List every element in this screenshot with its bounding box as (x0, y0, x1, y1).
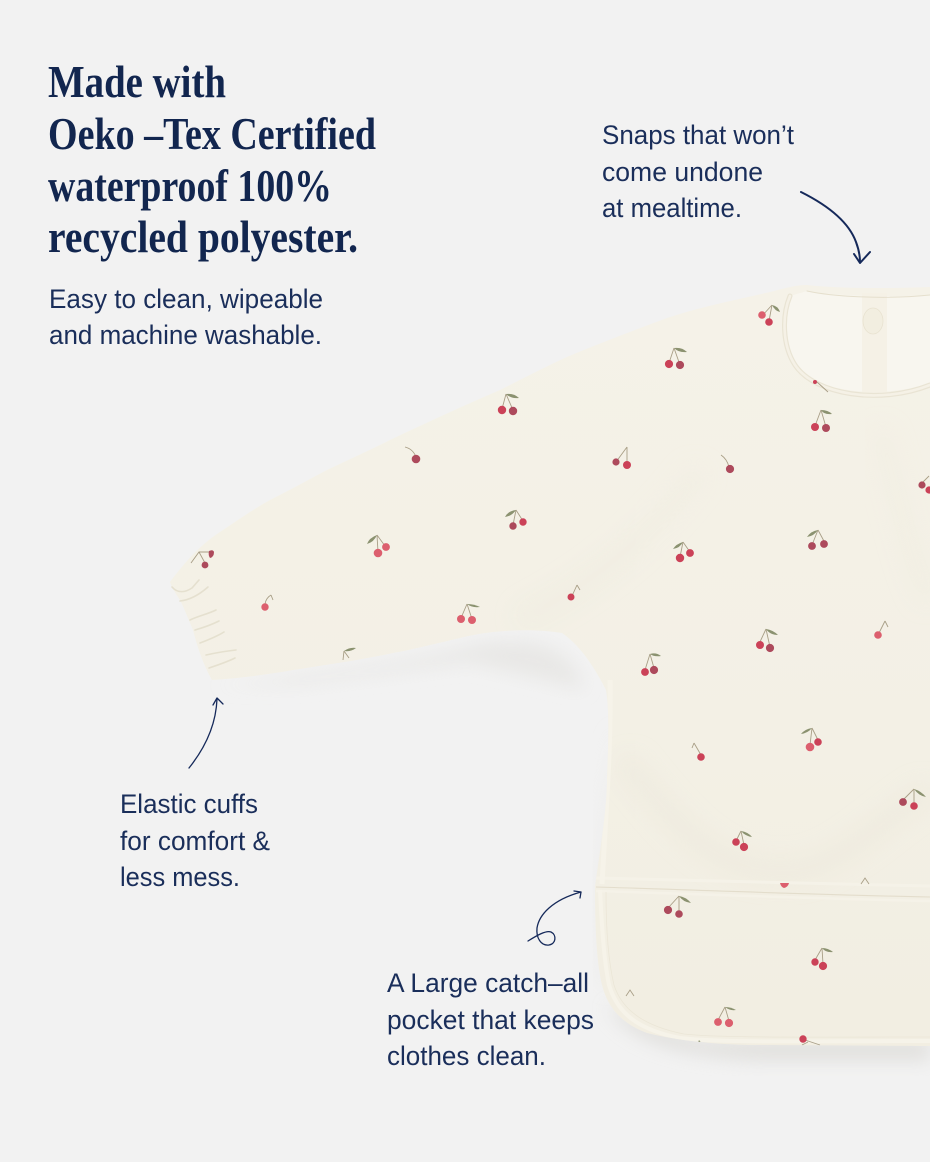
cherry 6 (721, 455, 734, 473)
snap button (863, 308, 883, 334)
heading (48, 56, 376, 262)
fabric folds (520, 430, 930, 871)
subheading text: and machine washable. (49, 320, 322, 350)
bib body (170, 285, 930, 1046)
cherry 33 (813, 380, 828, 392)
callout: pocket: clothes clean. (387, 1041, 546, 1071)
cherry 10 (367, 535, 390, 557)
callout: elastic cuffs: for comfort & (120, 826, 270, 856)
cherry 29 (714, 1007, 736, 1027)
arrow: elastic cuffs (189, 698, 223, 768)
callout: elastic cuffs: less mess. (120, 862, 240, 892)
cherry 16 (568, 585, 580, 600)
cherry 23 (899, 789, 926, 810)
cherry print (191, 305, 930, 1045)
callout: elastic cuffs (120, 789, 270, 892)
callout: snaps: come undone (602, 157, 763, 187)
cherry 8 (918, 476, 930, 494)
cherry 17 (343, 648, 356, 660)
neck opening inner lining (785, 291, 930, 392)
cherry 21 (801, 728, 822, 751)
cherry 14 (261, 595, 273, 611)
callout: snaps: Snaps that won’t (602, 120, 794, 150)
callout: elastic cuffs: Elastic cuffs (120, 789, 258, 819)
heading: recycled polyester. (48, 211, 358, 262)
cherry 3 (498, 394, 519, 415)
cherry 26 (861, 878, 869, 884)
collar binding (785, 291, 930, 395)
subheading text (49, 284, 323, 350)
bib garment (170, 285, 930, 1046)
cherry 18 (641, 653, 661, 676)
shadow under bib (215, 641, 930, 1060)
cherry 12 (807, 530, 828, 550)
callout: pocket: A Large catch–all (387, 968, 589, 998)
cherry 27 (664, 896, 691, 918)
callout: pocket: pocket that keeps (387, 1005, 594, 1035)
cherry 13 (191, 550, 214, 568)
cherry 1 (758, 305, 780, 326)
heading: waterproof 100% (48, 160, 332, 211)
subheading text: Easy to clean, wipeable (49, 284, 323, 314)
cherry 31 (799, 1035, 820, 1045)
pocket seam and bindings (596, 886, 930, 1038)
cherry 25 (780, 883, 789, 888)
elastic cuff gathers (172, 580, 236, 668)
heading: Made with (48, 56, 226, 107)
cherry 9 (505, 510, 527, 530)
callout: snaps (602, 120, 794, 223)
cherry 20 (874, 621, 888, 639)
cherry 11 (673, 542, 694, 562)
cherry 2 (665, 348, 687, 369)
cherry 5 (612, 447, 631, 469)
heading: Oeko –Tex Certified (48, 108, 376, 159)
callout: snaps: at mealtime. (602, 193, 742, 223)
cherry 28 (811, 948, 833, 970)
cherry 15 (457, 604, 480, 624)
cherry 32 (698, 1040, 700, 1042)
cherry 19 (756, 629, 778, 652)
placket (862, 293, 887, 393)
cherry 30 (626, 990, 634, 996)
cherry 4 (405, 447, 420, 463)
callout: pocket (387, 968, 594, 1071)
cherry 24 (732, 831, 752, 851)
arrow: snaps (801, 192, 870, 263)
cherry 7 (811, 410, 832, 432)
arrow: pocket (528, 891, 581, 945)
cherry 22 (692, 743, 705, 761)
